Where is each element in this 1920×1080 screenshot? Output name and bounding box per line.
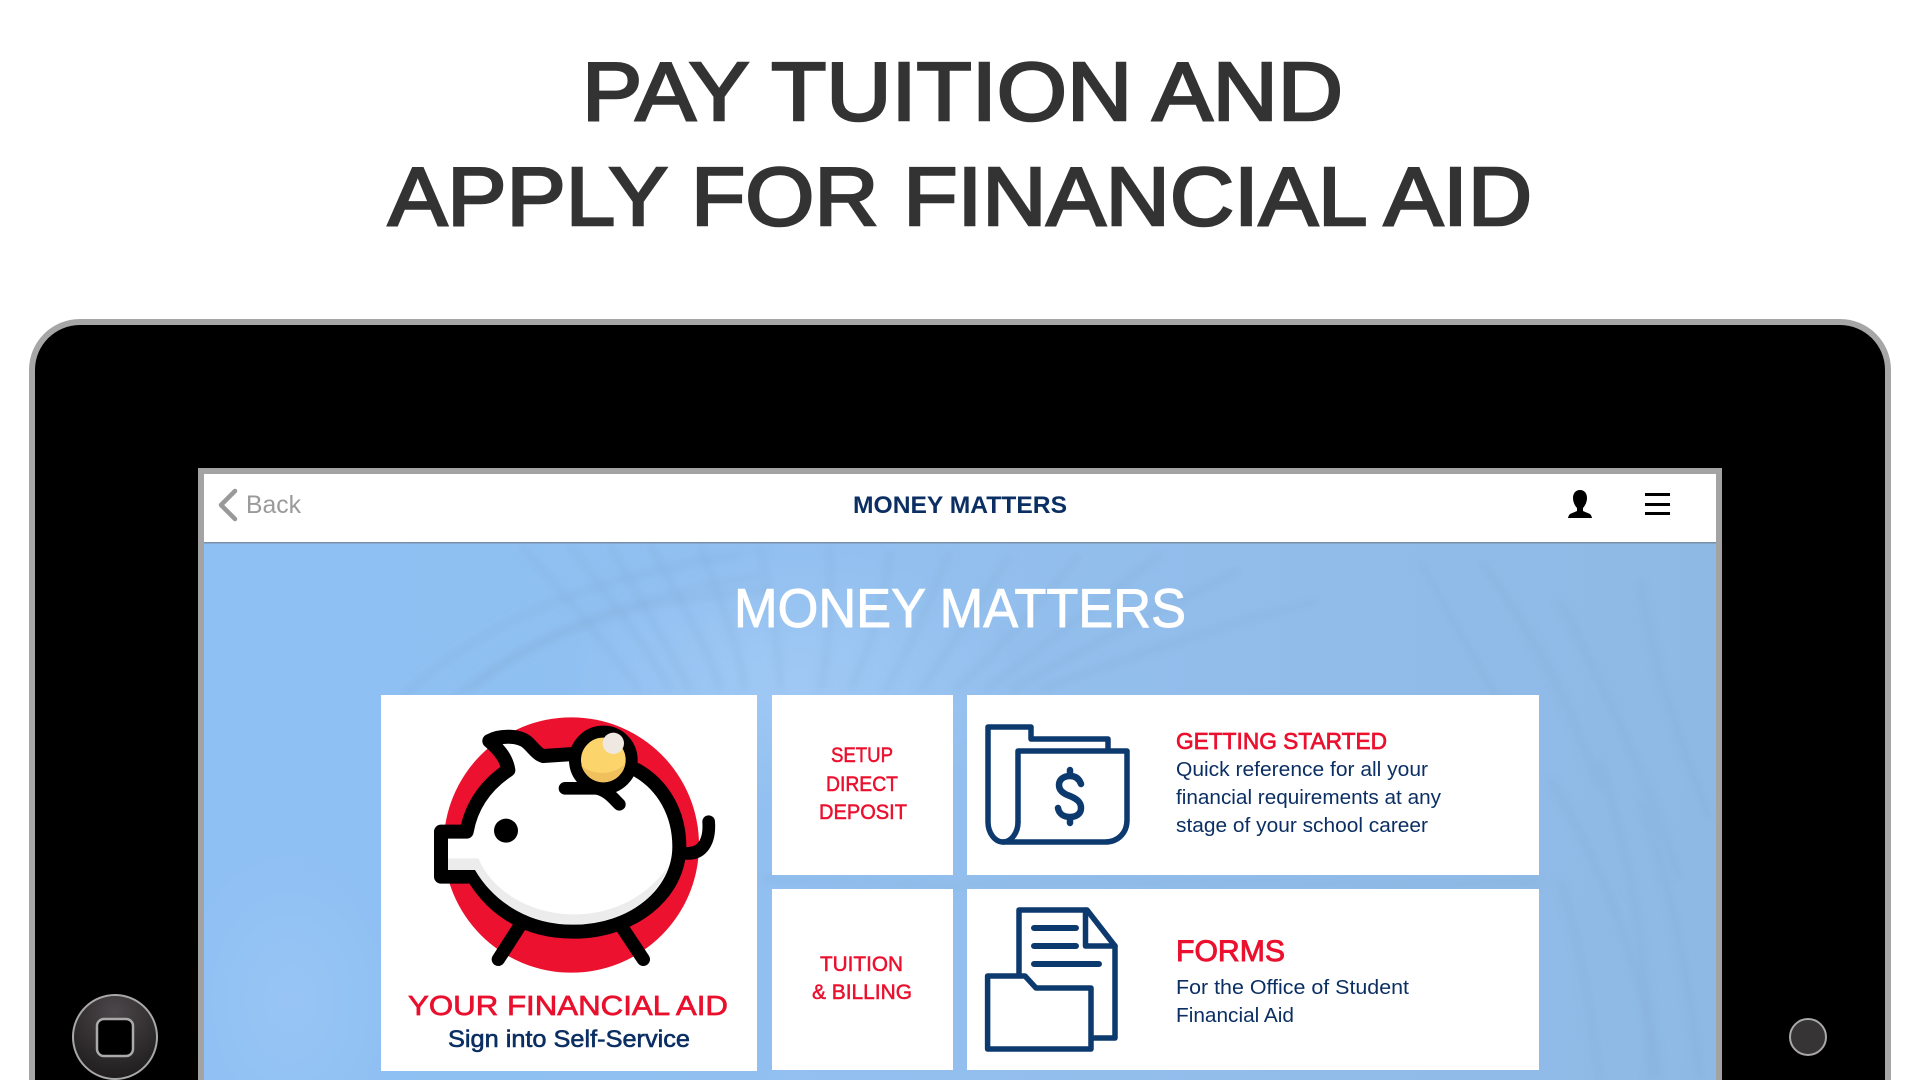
icon: menu [1645,493,1670,515]
side camera button [1790,1019,1826,1055]
panel: setup direct deposit: SETUP [831,744,893,767]
panel: tuition and billing: TUITION [820,953,903,976]
panel: tuition and billing: & BILLING [812,981,912,1004]
icon: user [1568,490,1592,518]
getting started text: GETTING STARTED [1176,728,1387,754]
panel: forms [967,889,1539,1070]
blue palm background [180,543,1716,1080]
getting started text: Quick reference for all your [1176,759,1428,781]
getting started text: financial requirements at any [1176,787,1441,809]
panel: your financial aid [381,695,757,1071]
getting started text [1176,728,1441,837]
header title: MONEY MATTERS [853,492,1067,519]
back button: Back [246,491,301,519]
back button [221,491,301,519]
title: APPLY FOR FINANCIAL AID [388,150,1532,243]
icon: document and folder [988,910,1115,1049]
tablet device frame [32,322,1888,1080]
title [388,45,1532,243]
panel: tuition and billing [772,889,953,1070]
screen heading: MONEY MATTERS [734,577,1186,639]
app screen [180,471,1719,1080]
aid label: YOUR FINANCIAL AID [408,990,728,1021]
forms text: Financial Aid [1176,1005,1294,1027]
panel: setup direct deposit: DIRECT [826,773,898,796]
header bar line [204,542,1716,544]
panel: setup direct deposit [772,695,953,875]
sign in label: Sign into Self-Service [448,1026,690,1053]
panel: getting started [967,695,1539,875]
getting started text: stage of your school career [1176,815,1428,837]
forms text [1176,935,1409,1027]
home button [73,995,157,1079]
forms text: FORMS [1176,935,1285,968]
panel: setup direct deposit: DEPOSIT [819,801,907,824]
icon: piggy bank [441,717,709,973]
forms text: For the Office of Student [1176,977,1409,999]
title: PAY TUITION AND [582,45,1343,138]
icon: dollar folder [988,727,1127,842]
